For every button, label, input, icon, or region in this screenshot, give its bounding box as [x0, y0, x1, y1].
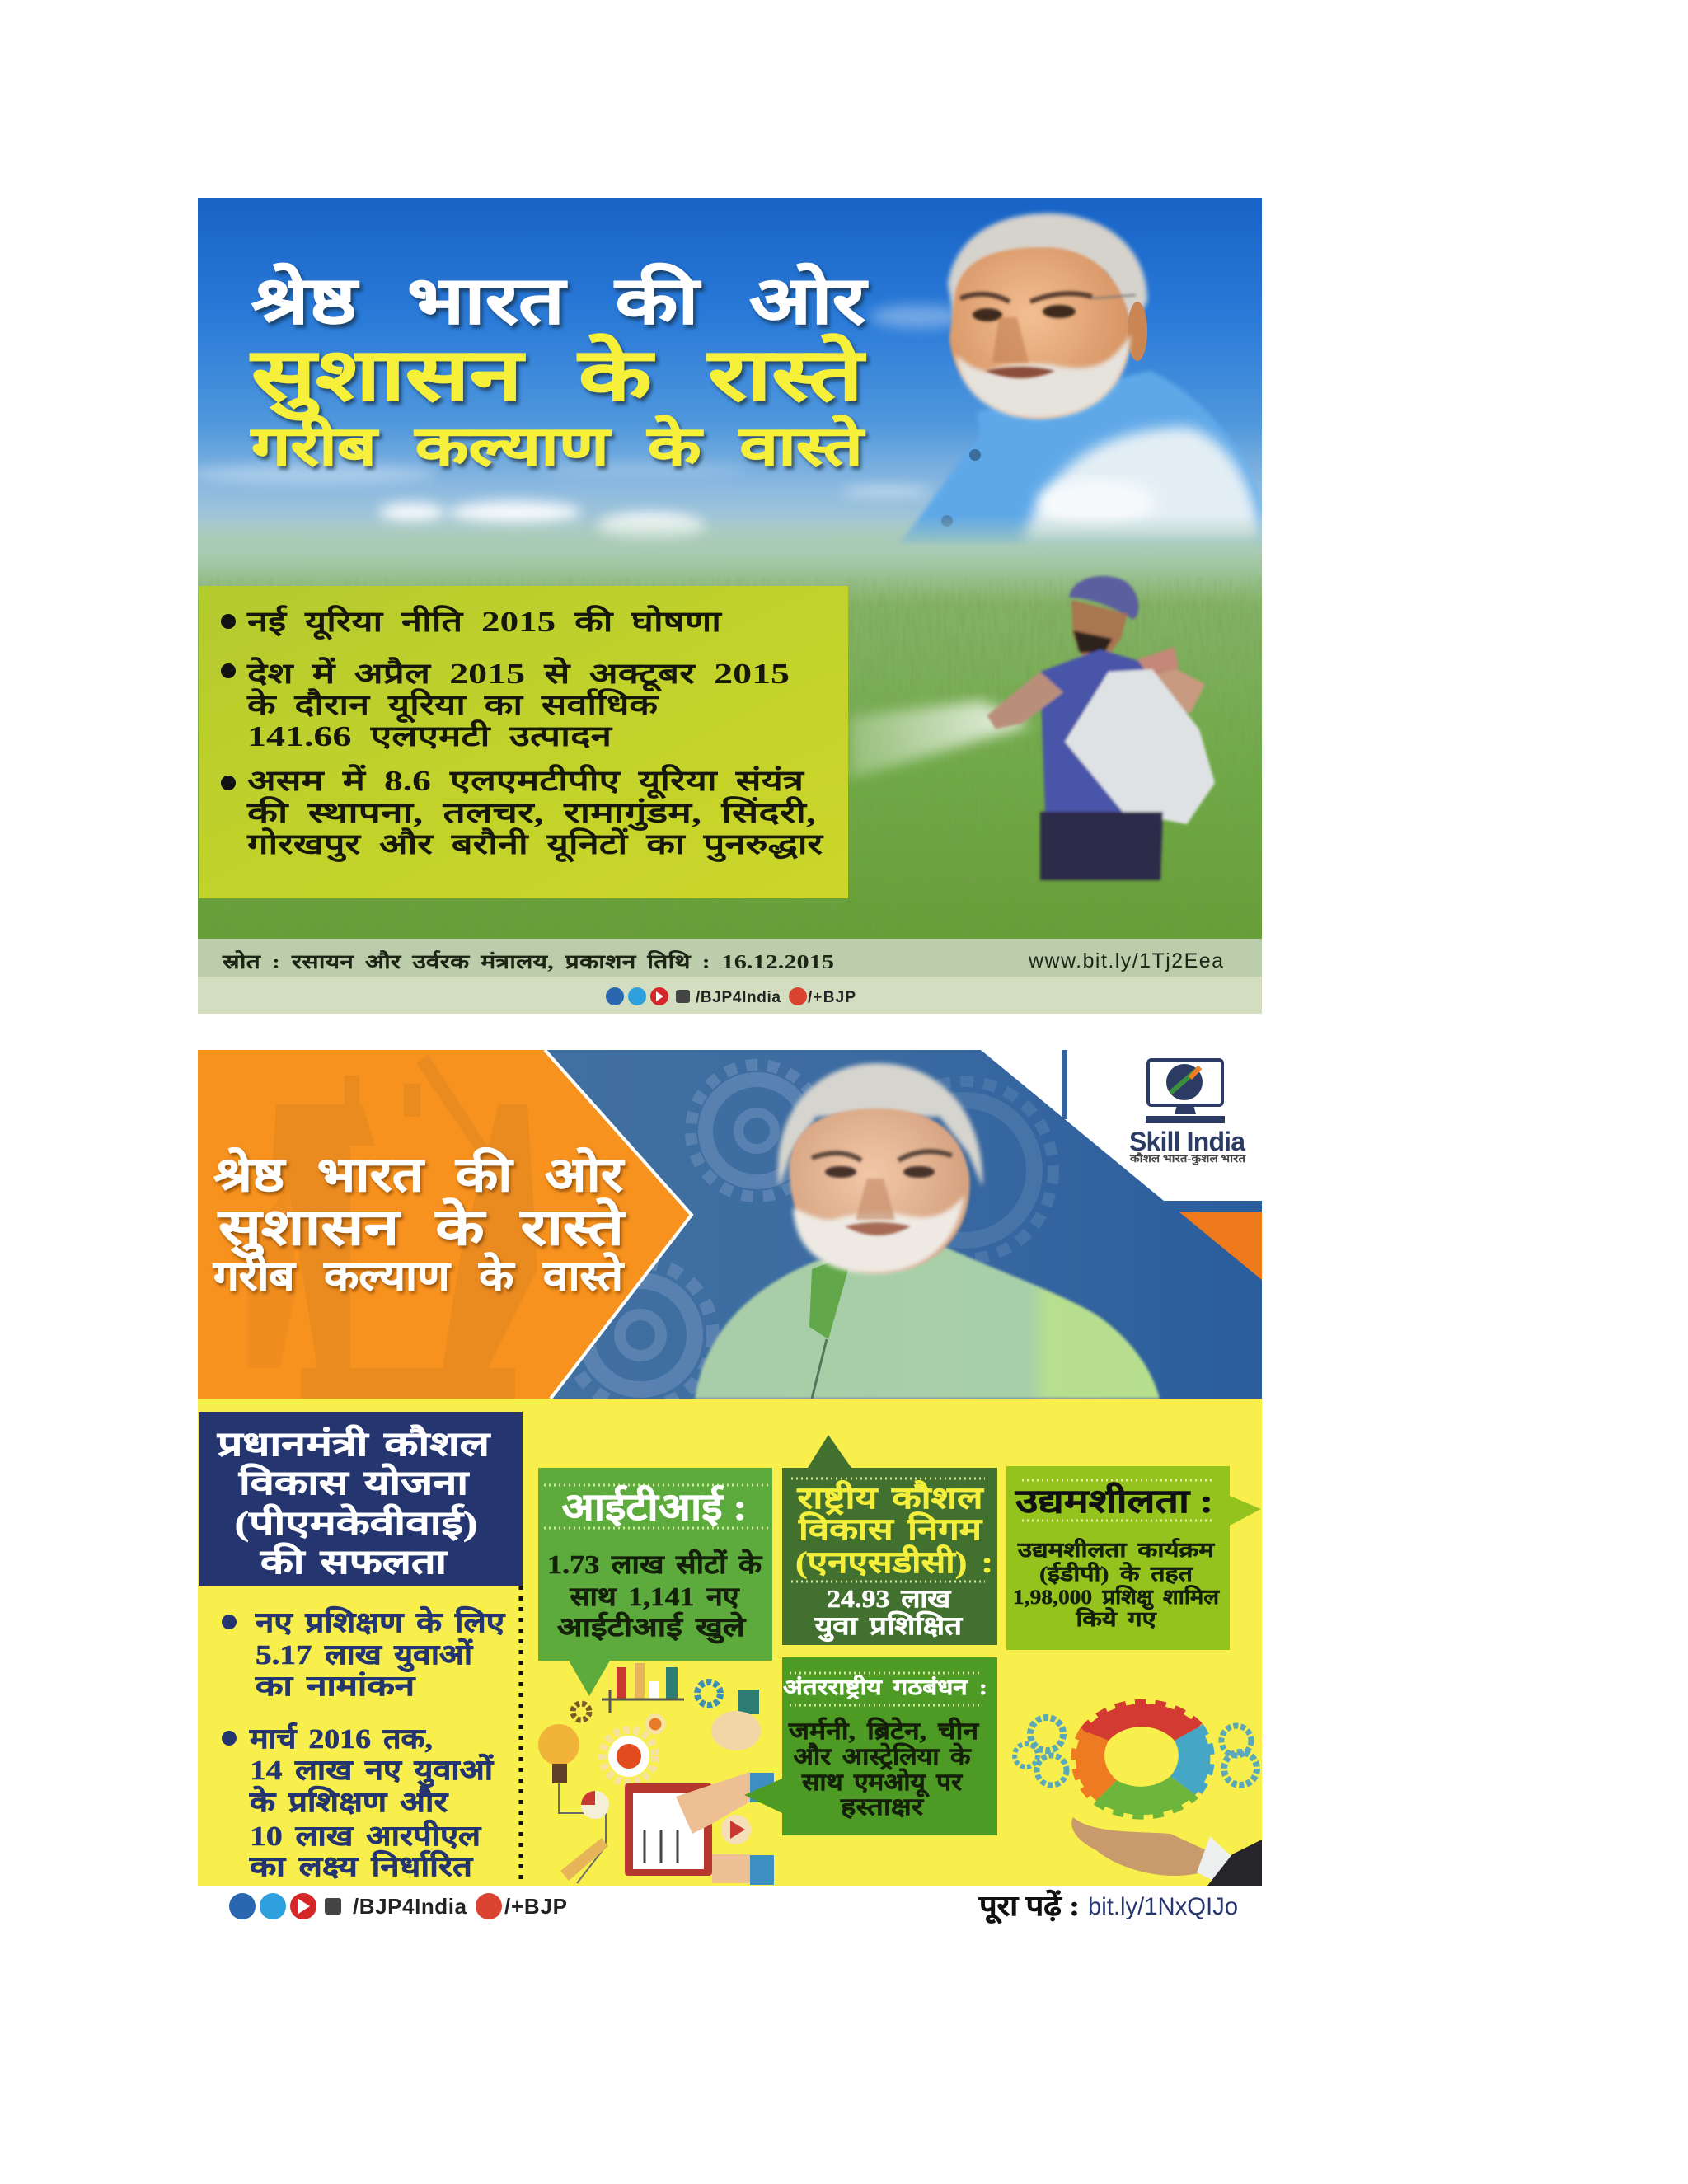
bullet text: गोरखपुर और बरौनी यूनिटों का पुनरुद्धार	[246, 827, 824, 863]
card: NSDC: युवा प्रशिक्षित	[814, 1610, 964, 1642]
navy title box: विकास योजना	[238, 1463, 470, 1502]
monitor	[1148, 1060, 1222, 1105]
card: NSDC	[782, 1435, 997, 1645]
navy title box: (पीएमकेवीवाई)	[234, 1503, 478, 1542]
card: NSDC: विकास निगम	[798, 1511, 983, 1547]
face	[790, 1108, 969, 1273]
card: international partnership: अंतरराष्ट्रीय गठबंधन :	[783, 1675, 987, 1699]
bullet text: 141.66 एलएमटी उत्पादन	[247, 719, 613, 752]
face	[1071, 600, 1128, 655]
logo: Skill India: कौशल भारत-कुशल भारत	[1129, 1152, 1246, 1165]
hands and cuffs	[676, 1772, 750, 1834]
card: entrepreneurship: 1,98,000 प्रशिक्षु शामिल	[1013, 1585, 1220, 1610]
heading: three title lines	[249, 263, 869, 477]
card: international partnership: हस्ताक्षर	[840, 1794, 924, 1821]
heading: banner title: गरीब कल्याण के वास्ते	[213, 1252, 625, 1299]
card: international partnership: जर्मनी, ब्रिटेन, चीन	[788, 1717, 979, 1745]
face	[950, 247, 1131, 419]
inner shirt	[809, 1253, 853, 1339]
turban	[1069, 576, 1139, 620]
vertical blue rule	[1062, 1050, 1067, 1119]
card: ITI: 1.73 लाख सीटों के	[547, 1549, 763, 1579]
card: international partnership: साथ एमओयू पर	[801, 1768, 963, 1797]
panel: bullet text box	[199, 586, 848, 898]
bullet text: के दौरान यूरिया का सर्वाधिक	[246, 688, 659, 724]
card: NSDC: 24.93 लाख	[827, 1584, 952, 1613]
icon: social icons	[606, 987, 807, 1005]
panel: PMKVY infographic	[198, 1397, 1262, 1886]
bullet text: असम में 8.6 एलएमटीपीए यूरिया संयंत्र	[247, 764, 805, 799]
grass field	[198, 544, 1262, 939]
hand and strap	[1137, 647, 1179, 677]
card: ITI: साथ 1,141 नए	[569, 1582, 740, 1611]
light bulb	[538, 1724, 579, 1765]
heading: banner title: श्रेष्ठ भारत की ओर	[213, 1147, 626, 1202]
collar line	[812, 1339, 827, 1399]
heading: banner title	[213, 1147, 626, 1299]
dotted vertical divider	[519, 1586, 523, 1886]
big ring segments	[1084, 1704, 1199, 1741]
shoulders and vest	[695, 1240, 1160, 1399]
card: entrepreneurship: उद्यमशीलता :	[1015, 1482, 1213, 1520]
panel: skill development banner	[198, 1050, 1262, 1408]
card: ITI: आईटीआई खुले	[557, 1611, 747, 1644]
fertiliser bag	[1065, 669, 1215, 824]
heading: three title lines: सुशासन के रास्ते	[249, 333, 866, 420]
sky background	[198, 198, 1262, 544]
silhouette of machinery	[247, 1055, 537, 1399]
social strip: /BJP4India	[696, 989, 781, 1006]
bar chart	[602, 1663, 684, 1713]
background gears	[568, 1065, 1053, 1408]
bullet markers	[221, 614, 236, 790]
shirt cuff	[1197, 1836, 1236, 1883]
portrait: leader in green vest	[695, 1063, 1160, 1399]
card: entrepreneurship: किये गए	[1075, 1607, 1157, 1631]
ear	[1128, 302, 1147, 361]
arms	[987, 672, 1063, 729]
orange triangle	[1179, 1212, 1262, 1280]
left bullets	[222, 1605, 505, 1882]
footer row: bit.ly/1NxQIJo	[1088, 1893, 1238, 1920]
gear teeth on ring	[1076, 1704, 1210, 1815]
yellow background	[198, 1397, 1262, 1886]
card: NSDC: (एनएसडीसी) :	[795, 1544, 993, 1580]
social strip	[198, 977, 1262, 1014]
logo: Skill India: Skill India	[1129, 1127, 1245, 1156]
white corner shape	[981, 1050, 1262, 1201]
blue background	[198, 1050, 1262, 1399]
bullet text: देश में अप्रैल 2015 से अक्टूबर 2015	[246, 657, 790, 692]
torso	[1040, 649, 1175, 812]
left bullets: नए प्रशिक्षण के लिए	[255, 1605, 505, 1638]
navy title box	[199, 1412, 523, 1586]
grass texture	[218, 577, 1231, 935]
illustration: ideas and tablet	[538, 1663, 774, 1885]
beard	[956, 334, 1131, 419]
illustration: colourful gears and hand	[1015, 1704, 1262, 1886]
footer row	[229, 1889, 1238, 1924]
card: NSDC: राष्ट्रीय कौशल	[796, 1480, 985, 1516]
orange gear	[612, 1740, 645, 1773]
black sleeve	[1207, 1840, 1262, 1886]
farmer spreading fertiliser	[849, 576, 1215, 880]
bullet text: की स्थापना, तलचर, रामागुंडम, सिंदरी,	[246, 796, 816, 831]
logo: Skill India	[1129, 1060, 1246, 1165]
hair	[948, 213, 1147, 330]
spray	[849, 701, 1030, 779]
heading: three title lines: गरीब कल्याण के वास्ते	[249, 415, 865, 477]
left bullets: का नामांकन	[255, 1671, 415, 1702]
vest	[898, 371, 1262, 544]
portrait: leader with cloud vest	[898, 213, 1262, 544]
pencil	[560, 1838, 608, 1881]
card: international partnership: और आस्ट्रेलिया के	[793, 1742, 972, 1770]
heading: three title lines: श्रेष्ठ भारत की ओर	[251, 263, 869, 338]
card: entrepreneurship: उद्यमशीलता कार्यक्रम	[1017, 1538, 1215, 1562]
source strip: www.bit.ly/1Tj2Eea	[1028, 949, 1223, 972]
left bullets: मार्च 2016 तक,	[249, 1722, 433, 1755]
card: international partnership	[744, 1657, 997, 1835]
card: ITI: आईटीआई :	[562, 1485, 747, 1528]
social strip: /+BJP	[808, 989, 856, 1006]
white arrow edge	[545, 1050, 692, 1399]
source strip	[198, 939, 1262, 977]
bullet text: नई यूरिया नीति 2015 की घोषणा	[246, 605, 723, 640]
source strip: स्रोत : रसायन और उर्वरक मंत्रालय, प्रकाशन तिथि : 16.12.2015	[222, 950, 834, 973]
navy title box: प्रधानमंत्री कौशल	[217, 1424, 492, 1463]
eyes and glasses	[960, 293, 1136, 378]
left bullets: 5.17 लाख युवाओं	[256, 1638, 473, 1672]
heading: banner title: सुशासन के रास्ते	[218, 1197, 626, 1259]
gears small	[697, 1682, 720, 1705]
bullet text	[246, 605, 824, 863]
footer row: पूरा पढ़ें :	[978, 1889, 1080, 1924]
tablet	[625, 1783, 712, 1876]
trousers	[1040, 812, 1163, 880]
navy title box: की सफलता	[260, 1542, 448, 1581]
card: entrepreneurship: (ईडीपी) के तहत	[1039, 1562, 1194, 1586]
icon: social icons	[229, 1893, 502, 1919]
left bullets: 10 लाख आरपीएल	[250, 1819, 482, 1852]
footer row: /BJP4India	[353, 1894, 467, 1919]
horizon haze	[198, 515, 1262, 606]
beard	[793, 1195, 964, 1273]
speech bubble	[711, 1711, 761, 1750]
eyes, nose and mouth	[812, 1151, 952, 1235]
hair	[778, 1063, 982, 1187]
footer row: /+BJP	[504, 1894, 567, 1919]
pie chart	[581, 1791, 609, 1819]
play icon	[721, 1815, 751, 1844]
left bullets: 14 लाख नए युवाओं	[250, 1753, 494, 1788]
left bullets: का लक्ष्य निर्धारित	[249, 1849, 474, 1882]
small blue gears	[1015, 1718, 1257, 1785]
left bullets: के प्रशिक्षण और	[249, 1785, 448, 1818]
card: entrepreneurship	[1006, 1466, 1261, 1650]
open hand	[1071, 1817, 1212, 1876]
clouds	[190, 305, 968, 542]
orange arrow panel	[198, 1050, 692, 1399]
panel: urea policy poster	[190, 198, 1262, 1014]
card: ITI	[538, 1468, 772, 1696]
